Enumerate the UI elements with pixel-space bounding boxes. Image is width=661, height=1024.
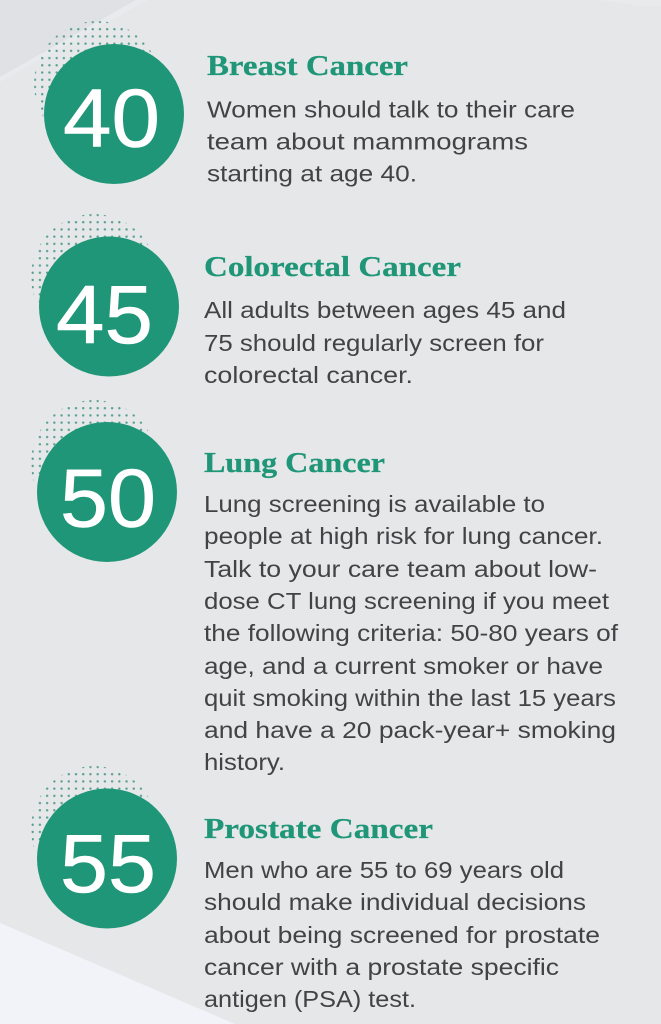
section: colorectal cancer <box>31 214 566 388</box>
badge: age 50 <box>37 422 177 562</box>
text: lung cancer advice: history. <box>204 749 285 775</box>
badge: age 45 <box>39 236 179 376</box>
text: lung cancer advice: Talk to your care team about low- <box>204 556 597 582</box>
heading: colorectal cancer: Colorectal Cancer <box>204 252 461 283</box>
icon: dot pattern behind 45 <box>31 214 157 340</box>
text: lung cancer advice: the following criteria: 50-80 years of <box>204 620 619 646</box>
text: colorectal cancer advice <box>204 297 566 388</box>
badge: age 55 <box>37 788 177 928</box>
text: lung cancer advice: dose CT lung screening if you meet <box>204 588 610 614</box>
heading: breast cancer: Breast Cancer <box>207 51 408 82</box>
icon: dot pattern behind 50 <box>31 400 157 526</box>
text: prostate cancer advice: about being screened for prostate <box>204 922 600 948</box>
text: breast cancer advice: Women should talk to their care <box>207 96 575 122</box>
section: prostate cancer <box>31 766 600 1012</box>
badge: age 50: 50 <box>60 452 156 544</box>
text: lung cancer advice: and have a 20 pack-year+ smoking <box>204 717 616 743</box>
text: lung cancer advice: people at high risk for lung cancer. <box>204 523 603 549</box>
text: prostate cancer advice <box>204 857 600 1012</box>
section: breast cancer <box>34 21 575 186</box>
text: prostate cancer advice: should make individual decisions <box>204 889 586 915</box>
badge: age 40: 40 <box>63 72 160 164</box>
text: lung cancer advice <box>204 491 619 775</box>
text: lung cancer advice: age, and a current smoker or have <box>204 653 603 679</box>
icon: dot pattern behind 40 <box>34 21 160 147</box>
section: lung cancer <box>31 400 619 775</box>
heading: prostate cancer: Prostate Cancer <box>204 814 433 845</box>
text: breast cancer advice: starting at age 40. <box>207 160 417 186</box>
text: colorectal cancer advice: 75 should regularly screen for <box>204 330 544 356</box>
text: colorectal cancer advice: colorectal cancer. <box>204 362 413 388</box>
badge: age 55: 55 <box>60 817 156 910</box>
text: colorectal cancer advice: All adults between ages 45 and <box>204 297 566 323</box>
text: prostate cancer advice: cancer with a prostate specific <box>204 954 559 980</box>
text: breast cancer advice: team about mammograms <box>207 128 528 154</box>
text: prostate cancer advice: Men who are 55 to 69 years old <box>204 857 564 883</box>
badge: age 40 <box>44 44 184 184</box>
text: lung cancer advice: Lung screening is available to <box>204 491 545 517</box>
icon: dot pattern behind 55 <box>31 766 157 892</box>
heading: lung cancer: Lung Cancer <box>204 448 385 479</box>
text: breast cancer advice <box>207 96 575 186</box>
badge: age 45: 45 <box>56 268 153 361</box>
text: lung cancer advice: quit smoking within the last 15 years <box>204 685 616 711</box>
text: prostate cancer advice: antigen (PSA) test. <box>204 986 416 1012</box>
